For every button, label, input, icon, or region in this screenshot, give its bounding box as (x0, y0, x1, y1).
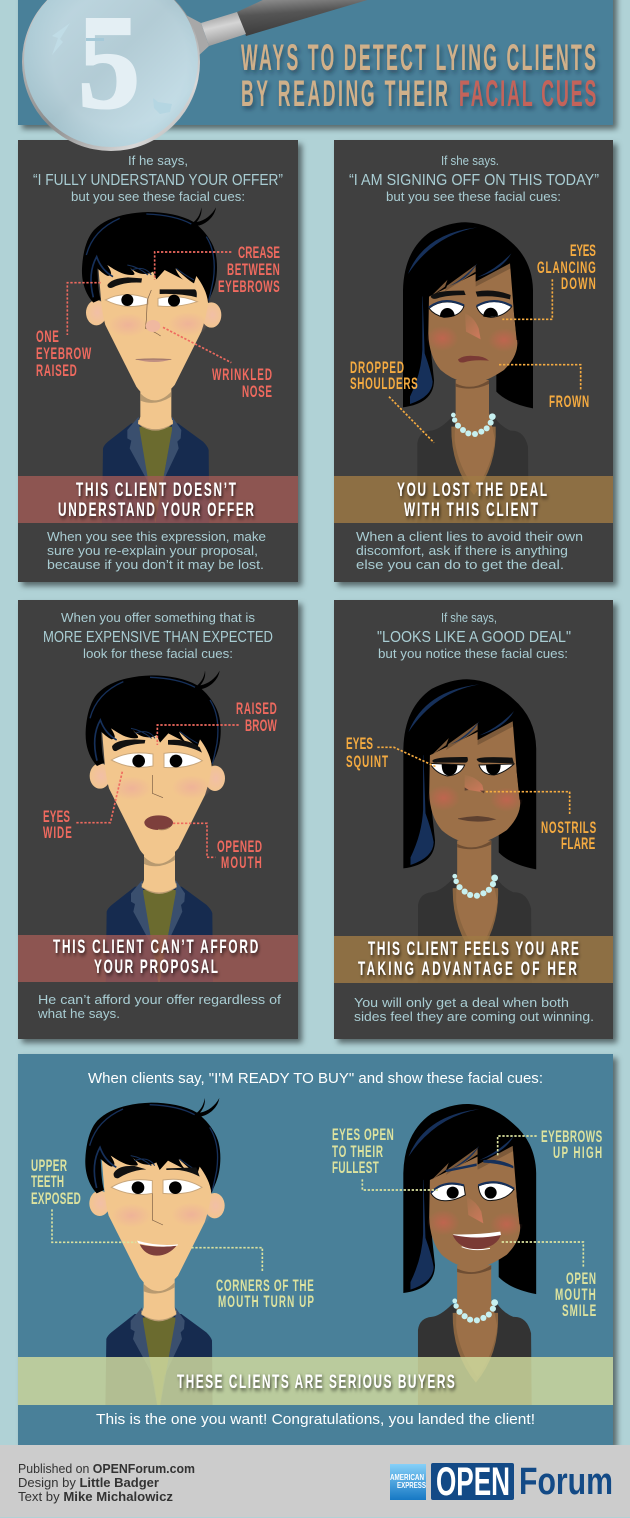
label: opened mouth: OPENED (217, 837, 262, 856)
leader line: smile (502, 1242, 583, 1267)
panel background (18, 600, 298, 1039)
panel: lost the deal (334, 140, 613, 582)
label: eyes wide: WIDE (43, 823, 72, 842)
credits: Published on OPENForum.com (18, 1461, 195, 1476)
verdict band: YOUR PROPOSAL (94, 957, 218, 978)
footer (0, 1445, 630, 1517)
label: dropped shoulders: DROPPED (350, 358, 404, 377)
label: open mouth smile (555, 1269, 596, 1320)
advice text (37, 993, 282, 1021)
intro text (33, 154, 283, 204)
label: dropped shoulders: SHOULDERS (350, 374, 418, 393)
leader line: nostrils (486, 792, 570, 815)
label: eyes wide (43, 807, 72, 842)
label: eyes open: TO THEIR (332, 1142, 383, 1161)
label: nostrils flare: NOSTRILS (541, 818, 596, 837)
intro text: look for these facial cues: (83, 647, 233, 661)
intro text: When clients say, "I'M READY TO BUY" and show these facial cues: (88, 1070, 543, 1087)
logo: American Express OPEN Forum: OPEN (436, 1460, 510, 1504)
advice text (356, 530, 583, 572)
label: eyes squint (346, 734, 389, 771)
neck (184, 14, 209, 58)
leader line: eyes (377, 747, 436, 767)
advice text: else you can do to get the deal. (356, 558, 564, 572)
intro text (43, 611, 273, 661)
verdict band: YOU LOST THE DEAL (397, 480, 547, 501)
advice text: what he says. (37, 1007, 120, 1021)
panel: serious buyers (18, 1054, 613, 1457)
label: wrinkled nose: NOSE (242, 382, 272, 401)
label: crease between eyebrows: CREASE (238, 243, 280, 262)
verdict band: UNDERSTAND YOUR OFFER (58, 500, 254, 521)
intro text: If she says, (441, 611, 497, 625)
leader line: eyes (76, 772, 122, 823)
intro text: “I AM SIGNING OFF ON THIS TODAY” (349, 172, 599, 189)
advice text: sure you re-explain your proposal, (47, 544, 258, 558)
character: man smiling (85, 1098, 225, 1405)
label: dropped shoulders (350, 358, 418, 393)
magnifying glass (22, 0, 374, 151)
verdict band: THIS CLIENT CAN’T AFFORD (53, 937, 258, 958)
label: eyes glancing down: EYES (570, 241, 596, 260)
label: wrinkled nose (212, 365, 272, 401)
advice text: He can’t afford your offer regardless of (38, 993, 282, 1007)
label: one eyebrow raised: EYEBROW (36, 344, 91, 363)
label: corners of the mouth: CORNERS OF THE (216, 1276, 314, 1295)
label: eyebrows up high (541, 1127, 602, 1162)
leader line: corners (191, 1248, 262, 1272)
character: man wide-eyed (86, 671, 225, 982)
panel background (18, 1054, 613, 1445)
label: upper teeth exposed: UPPER (31, 1156, 67, 1175)
leader line: nose (163, 327, 231, 363)
credits (18, 1461, 195, 1504)
label: nostrils flare (541, 818, 596, 853)
logo: American Express OPEN Forum (390, 1460, 613, 1504)
label: open mouth smile: OPEN (566, 1269, 596, 1288)
label: upper teeth exposed: TEETH (31, 1172, 64, 1191)
intro text: but you notice these facial cues: (378, 647, 568, 661)
label: corners of the mouth (216, 1276, 314, 1311)
advice text (354, 996, 594, 1024)
banner background (18, 0, 613, 125)
label: wrinkled nose: WRINKLED (212, 365, 272, 384)
label: crease between eyebrows: BETWEEN (227, 260, 280, 279)
advice text: When you see this expression, make (47, 530, 266, 544)
label: open mouth smile: MOUTH (555, 1285, 596, 1304)
leader line: eyes (502, 279, 552, 319)
label: open mouth smile: SMILE (562, 1301, 596, 1320)
verdict band (18, 935, 298, 982)
logo: American Express OPEN Forum: EXPRESS (397, 1481, 427, 1490)
intro text: "LOOKS LIKE A GOOD DEAL" (377, 629, 571, 646)
label: upper teeth exposed: EXPOSED (31, 1189, 81, 1208)
panel: doesn't understand (18, 140, 298, 582)
character: woman smiling (403, 1104, 536, 1405)
advice text (47, 530, 266, 572)
label: eyes squint: EYES (346, 734, 373, 753)
leader line: shoulders (389, 397, 434, 443)
advice text: You will only get a deal when both (354, 996, 569, 1010)
lens rim (22, 0, 200, 151)
label: raised brow: BROW (245, 716, 277, 735)
advice text: because if you don’t it may be lost. (47, 558, 264, 572)
title: BY READING THEIR (241, 73, 448, 115)
label: eyebrows up high: EYEBROWS (541, 1127, 602, 1146)
panel: taken advantage of (334, 600, 613, 1039)
stencil gap (86, 38, 104, 41)
leader line: brow (157, 725, 239, 745)
closing text: This is the one you want! Congratulations, you landed the client! (96, 1411, 535, 1428)
verdict band: THIS CLIENT DOESN’T (76, 480, 236, 501)
label: upper teeth exposed (31, 1156, 81, 1208)
handle (237, 0, 374, 36)
verdict band: WITH THIS CLIENT (404, 500, 538, 521)
label: eyes glancing down (537, 241, 596, 293)
panel background (18, 140, 298, 582)
leader line: eyebrows (498, 1136, 537, 1157)
label: corners of the mouth: MOUTH TURN UP (218, 1292, 314, 1311)
label: one eyebrow raised (36, 327, 91, 380)
verdict band (334, 476, 613, 523)
intro text (377, 611, 571, 661)
intro text (349, 154, 599, 204)
panel: can't afford (18, 600, 298, 1039)
title (241, 37, 596, 115)
intro text: If he says, (128, 154, 188, 168)
verdict band: THIS CLIENT FEELS YOU ARE (368, 939, 579, 960)
label: raised brow: RAISED (236, 699, 277, 718)
label: opened mouth: MOUTH (221, 853, 262, 872)
character: woman glancing down (403, 222, 533, 494)
leader line: mouth (173, 823, 215, 857)
ferrule (201, 12, 246, 46)
footer background (0, 1445, 630, 1517)
lens (24, 0, 198, 147)
intro text: MORE EXPENSIVE THAN EXPECTED (43, 629, 273, 646)
title: WAYS TO DETECT LYING CLIENTS (241, 37, 596, 79)
character: man confused (82, 208, 222, 523)
label: eyes open: EYES OPEN (332, 1125, 394, 1144)
panel background (334, 600, 613, 1039)
label: eyes open: FULLEST (332, 1158, 379, 1177)
leader line: eyebrow (67, 283, 101, 335)
verdict band (334, 936, 613, 983)
logo: American Express OPEN Forum: AMERICAN (390, 1473, 424, 1482)
advice text: discomfort, ask if there is anything (356, 544, 568, 558)
label: eyes open (332, 1125, 394, 1177)
label: nostrils flare: FLARE (561, 834, 595, 853)
label: opened mouth (217, 837, 262, 872)
glass chip left (52, 23, 70, 55)
panel background (334, 140, 613, 582)
header banner (18, 0, 613, 125)
verdict band: TAKING ADVANTAGE OF HER (358, 959, 577, 980)
label: one eyebrow raised: RAISED (36, 361, 77, 380)
label: crease between eyebrows (218, 243, 280, 296)
leader line: frown (499, 365, 581, 390)
credits: Text by Mike Michalowicz (18, 1489, 173, 1504)
advice text: When a client lies to avoid their own (356, 530, 583, 544)
verdict band: THESE CLIENTS ARE SERIOUS BUYERS (177, 1372, 455, 1393)
credits: Design by Little Badger (18, 1475, 159, 1490)
leader line: eyes open (362, 1179, 438, 1190)
verdict band (18, 476, 298, 523)
label: eyes glancing down: GLANCING (537, 258, 596, 277)
label: eyes squint: SQUINT (346, 752, 389, 771)
label: raised brow (236, 699, 277, 735)
intro text: but you see these facial cues: (386, 190, 561, 204)
character: woman squinting (403, 679, 536, 958)
intro text: but you see these facial cues: (71, 190, 245, 204)
glass chip right (153, 98, 172, 114)
intro text: “I FULLY UNDERSTAND YOUR OFFER” (33, 172, 283, 189)
label: one eyebrow raised: ONE (36, 327, 59, 346)
intro text: When you offer something that is (61, 611, 255, 625)
leader line: crease (155, 252, 231, 280)
label: eyes wide: EYES (43, 807, 70, 826)
label: eyebrows up high: UP HIGH (553, 1143, 602, 1162)
advice text: sides feel they are coming out winning. (354, 1010, 594, 1024)
label: frown: FROWN (549, 392, 589, 411)
label: eyes glancing down: DOWN (561, 274, 596, 293)
label: crease between eyebrows: EYEBROWS (218, 277, 280, 296)
verdict band (18, 1357, 613, 1405)
leader line: teeth (52, 1209, 136, 1242)
title: FACIAL CUES (459, 73, 596, 115)
intro text: If she says. (441, 154, 499, 168)
